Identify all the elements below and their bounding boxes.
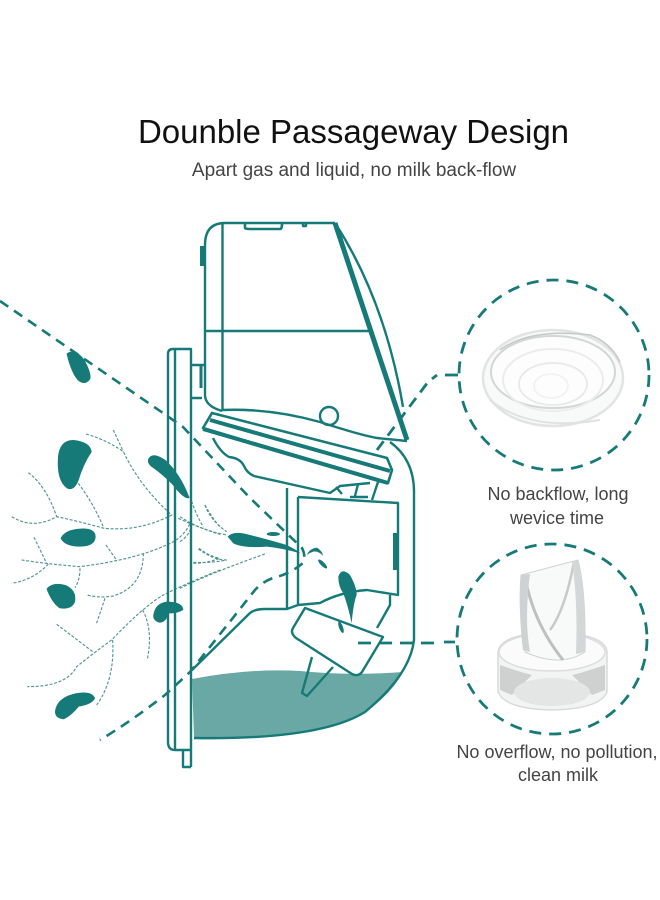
text: backflow caption: No backflow, long [487,484,629,504]
milk splash droplets [228,532,357,634]
subtitle: Apart gas and liquid, no milk back-flow [192,160,516,181]
text: overflow caption: No overflow, no pollution, [456,742,658,762]
lid band [203,413,392,500]
dashed circle: duckbill valve [457,544,647,734]
callout line to duckbill valve [358,642,455,643]
bottle body [194,442,414,738]
photo: silicone membrane disc [483,330,623,426]
flange plate [168,349,205,767]
title: Dounble Passageway Design [138,113,569,150]
text: backflow caption: wevice time [509,508,604,528]
veins: dashed milk ducts [12,430,267,705]
breast outline dashed [0,301,304,740]
milk droplets in the breast [48,353,188,718]
photo: duckbill valve [498,560,607,710]
dashed circle: backflow disc [459,280,649,470]
callout line to backflow disc [377,375,458,450]
air tube and valve chamber [192,488,398,670]
motor housing [202,223,407,441]
duckbill valve drawing [292,608,383,696]
text: overflow caption: clean milk [518,765,599,785]
milk liquid fill [192,670,403,738]
